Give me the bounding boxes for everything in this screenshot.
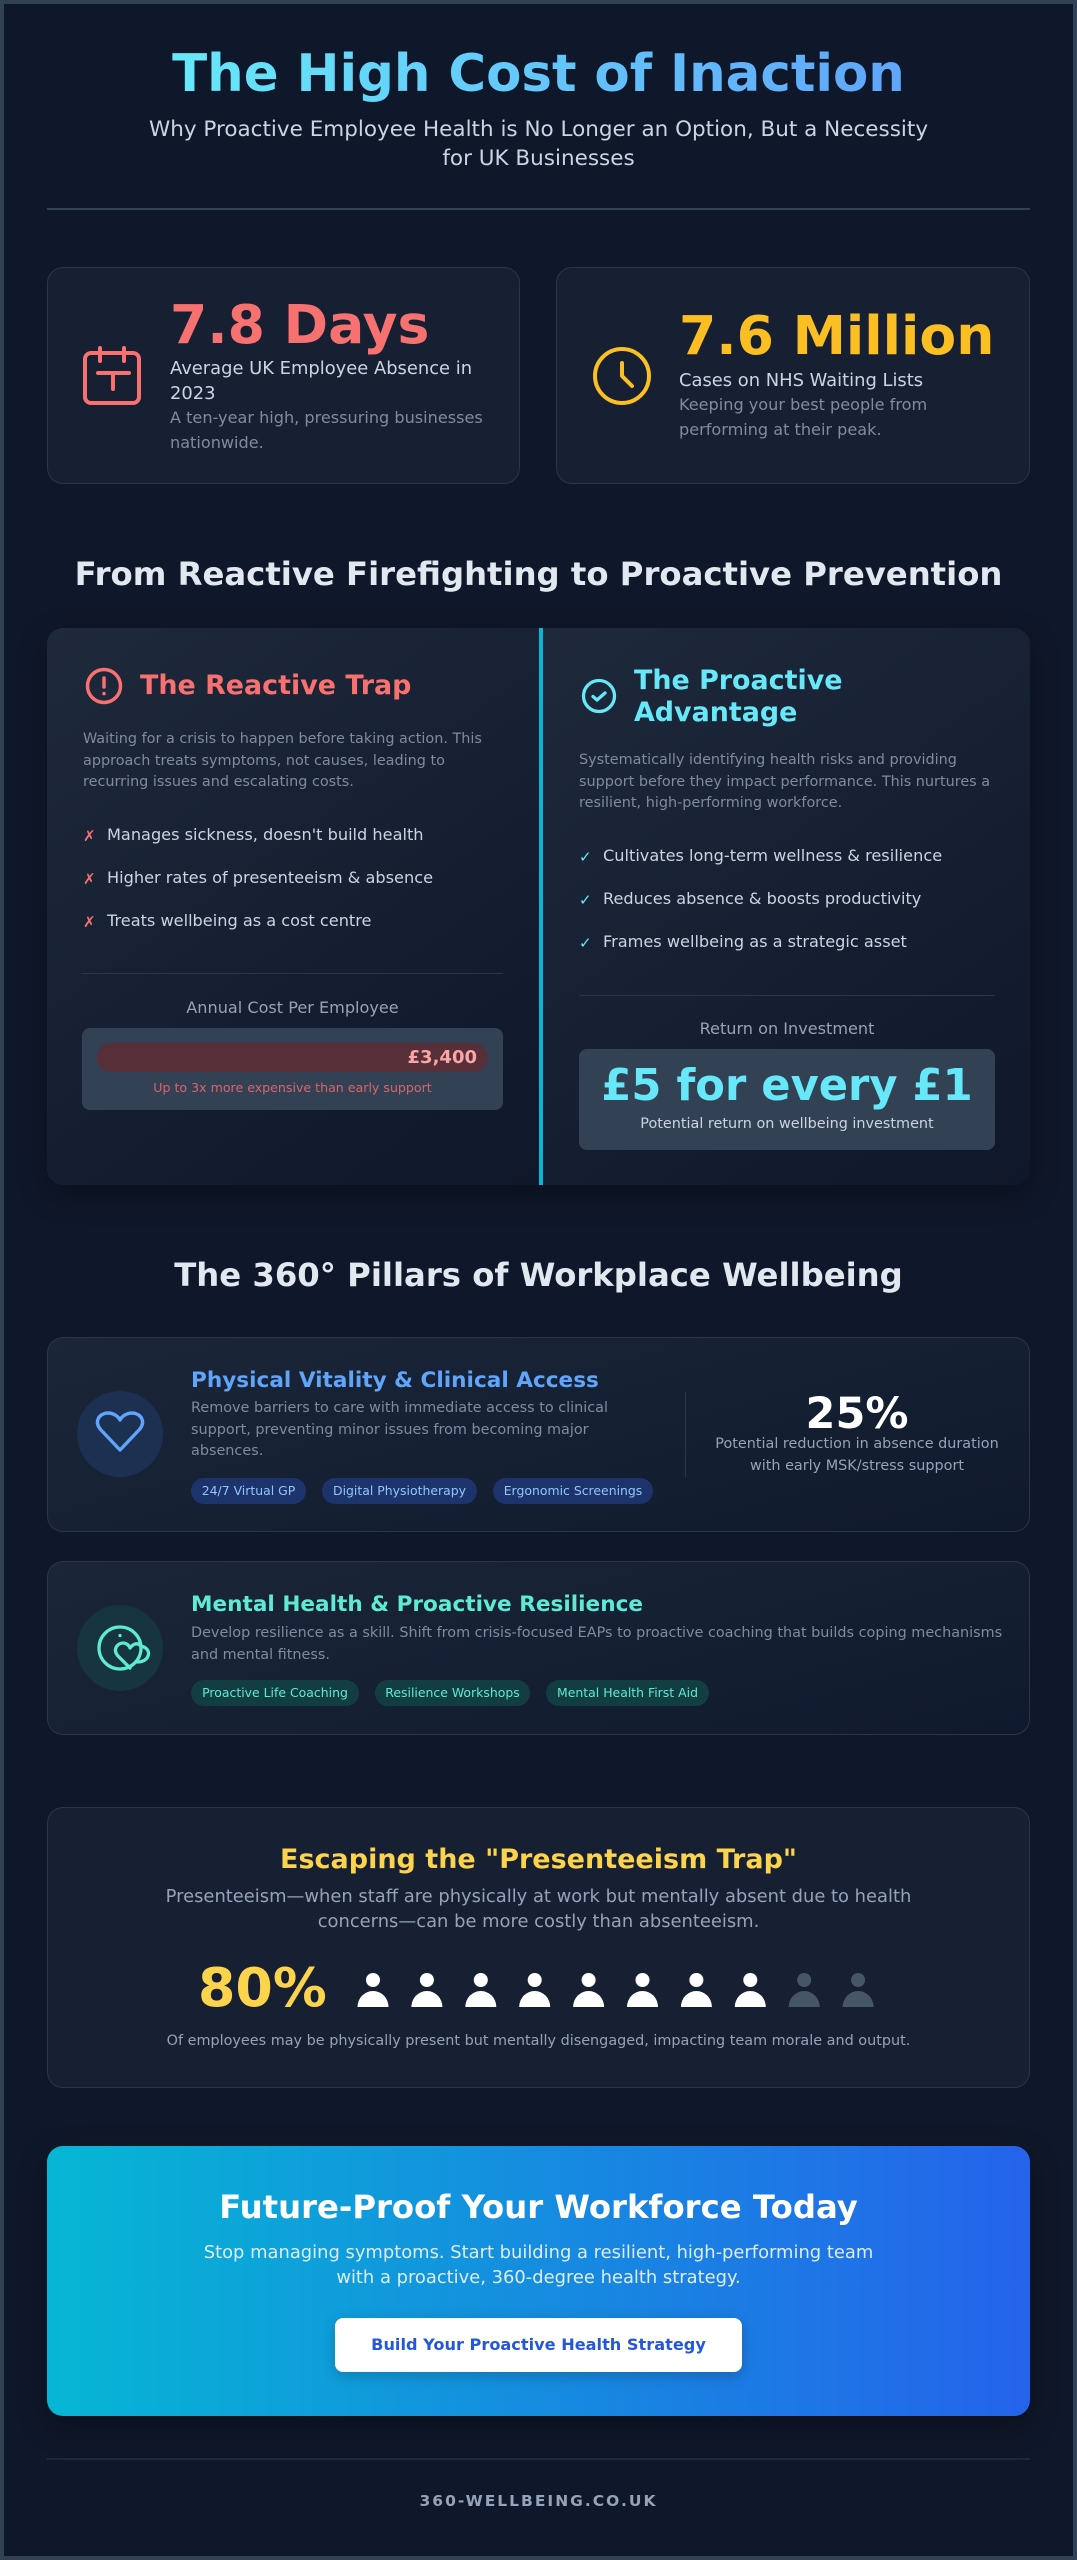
list: reactive drawbacks: ✗ [83,870,96,888]
stat note [170,408,483,452]
website: 360-WELLBEING.CO.UK [420,2492,657,2510]
caption [715,1436,999,1474]
stat note: A ten-year high, pressuring businesses [170,408,483,427]
list: proactive benefits: Cultivates long-term wellness & resilience [603,846,942,865]
description: concerns—can be more costly than absenteeism. [318,1911,759,1932]
panel: physical vitality [47,1337,1030,1532]
tags: Ergonomic Screenings [504,1483,642,1498]
description: support, preventing minor issues from becoming major [191,1422,589,1438]
stat note: performing at their peak. [679,420,882,439]
tags: Mental Health First Aid [557,1685,698,1700]
heading: Mental Health & Proactive Resilience [191,1592,643,1617]
ROI value: £5 for every £1 [601,1061,973,1111]
list: reactive drawbacks: ✗ [83,827,96,845]
heading: Physical Vitality & Clinical Access [191,1368,599,1393]
list: reactive drawbacks: Manages sickness, doesn't build health [107,825,424,844]
description: and mental fitness. [191,1647,330,1663]
caption: Potential reduction in absence duration [715,1436,999,1452]
tags: Proactive Life Coaching [202,1685,348,1700]
panel: call to action [47,2146,1030,2416]
pictogram: 8 of 10 employees [358,1973,874,2007]
heading: Escaping the "Presenteeism Trap" [280,1844,797,1875]
description [191,1625,1002,1663]
heading [634,664,842,728]
stat label: 2023 [170,383,216,404]
footer [47,2458,1030,2518]
tags [191,1478,653,1504]
tags [191,1680,709,1706]
panel: mental health [47,1561,1030,1735]
stat: 25 percent [715,1389,999,1474]
description [204,2242,873,2288]
description: Remove barriers to care with immediate access to clinical [191,1400,608,1416]
panel: presenteeism [47,1807,1030,2088]
tags: Resilience Workshops [385,1685,520,1700]
stat value: 7.6 Million [679,304,994,367]
value: 25% [806,1389,908,1439]
stat label: Cases on NHS Waiting Lists [679,370,923,391]
subtitle: for UK Businesses [442,146,635,171]
caption: with early MSK/stress support [750,1458,964,1474]
panel: comparison [47,628,1030,1185]
ROI box [579,1049,995,1150]
description [191,1400,608,1459]
icon: check circle [582,678,616,714]
title: The High Cost of Inaction [172,44,905,104]
description: Systematically identifying health risks and providing [579,752,957,768]
icon: calendar [83,346,141,405]
cost note: Up to 3x more expensive than early support [153,1080,432,1095]
list: proactive benefits: Reduces absence & boosts productivity [603,889,921,908]
description: recurring issues and escalating costs. [83,774,354,790]
panel: proactive advantage [539,628,1030,1185]
icon: clock [593,347,651,405]
stat label: Average UK Employee Absence in [170,358,472,379]
list: reactive drawbacks [83,825,433,931]
label: ROI: Return on Investment [700,1019,874,1038]
tags: 24/7 Virtual GP [202,1483,295,1498]
icon: heart [77,1391,163,1477]
list: reactive drawbacks: ✗ [83,913,96,931]
icon: alert [86,668,122,704]
stat: 80 percent: 80% [198,1956,327,2019]
caption: Of employees may be physically present but mentally disengaged, impacting team morale and output. [167,2033,910,2049]
list: reactive drawbacks: Higher rates of presenteeism & absence [107,868,433,887]
list: proactive benefits: ✓ [579,848,592,866]
cost box [82,1028,503,1110]
description: approach treats symptoms, not causes, leading to [83,753,445,769]
ROI note: Potential return on wellbeing investment [640,1116,934,1132]
list: proactive benefits [579,846,942,952]
stat card: NHS waiting lists [556,267,1030,484]
heading: The Reactive Trap [140,670,411,701]
tags: Digital Physiotherapy [333,1483,466,1498]
description [83,731,482,790]
section heading: prevention: From Reactive Firefighting to Proactive Prevention [75,555,1002,593]
description: absences. [191,1443,263,1459]
button: Build Your Proactive Health Strategy [371,2335,706,2354]
heading: Advantage [634,697,797,728]
description: with a proactive, 360-degree health strategy. [336,2267,741,2288]
stat card: absence days [47,267,520,484]
description: Waiting for a crisis to happen before taking action. This [83,731,482,747]
button [335,2318,742,2372]
list: proactive benefits: Frames wellbeing as a strategic asset [603,932,907,951]
heading: The Proactive [634,664,842,696]
panel: reactive trap [47,628,539,1185]
cost bar [97,1043,488,1072]
list: proactive benefits: ✓ [579,891,592,909]
subtitle [149,117,928,171]
stat value: 7.8 Days [170,293,429,356]
heading: Future-Proof Your Workforce Today [219,2188,858,2226]
cost bar: £3,400 [408,1047,477,1068]
description: Stop managing symptoms. Start building a resilient, high-performing team [204,2242,873,2263]
header rule [47,208,1030,210]
description [166,1886,911,1932]
description: support before they impact performance. This nurtures a [579,774,990,790]
list: proactive benefits: ✓ [579,934,592,952]
description: resilient, high-performing workforce. [579,795,842,811]
header [47,44,1030,210]
list: reactive drawbacks: Treats wellbeing as a cost centre [107,911,371,930]
stat label [170,358,472,404]
icon: mental resilience [77,1605,163,1691]
stat note: nationwide. [170,433,264,452]
label: annual cost: Annual Cost Per Employee [186,998,399,1017]
subtitle: Why Proactive Employee Health is No Longer an Option, But a Necessity [149,117,928,142]
section heading: pillars: The 360° Pillars of Workplace Wellbeing [174,1256,903,1294]
description: Develop resilience as a skill. Shift from crisis-focused EAPs to proactive coaching that builds coping mechanisms [191,1625,1002,1641]
description: Presenteeism—when staff are physically at work but mentally absent due to health [166,1886,911,1907]
stat note: Keeping your best people from [679,395,927,414]
description [579,752,990,811]
stat note [679,395,927,439]
